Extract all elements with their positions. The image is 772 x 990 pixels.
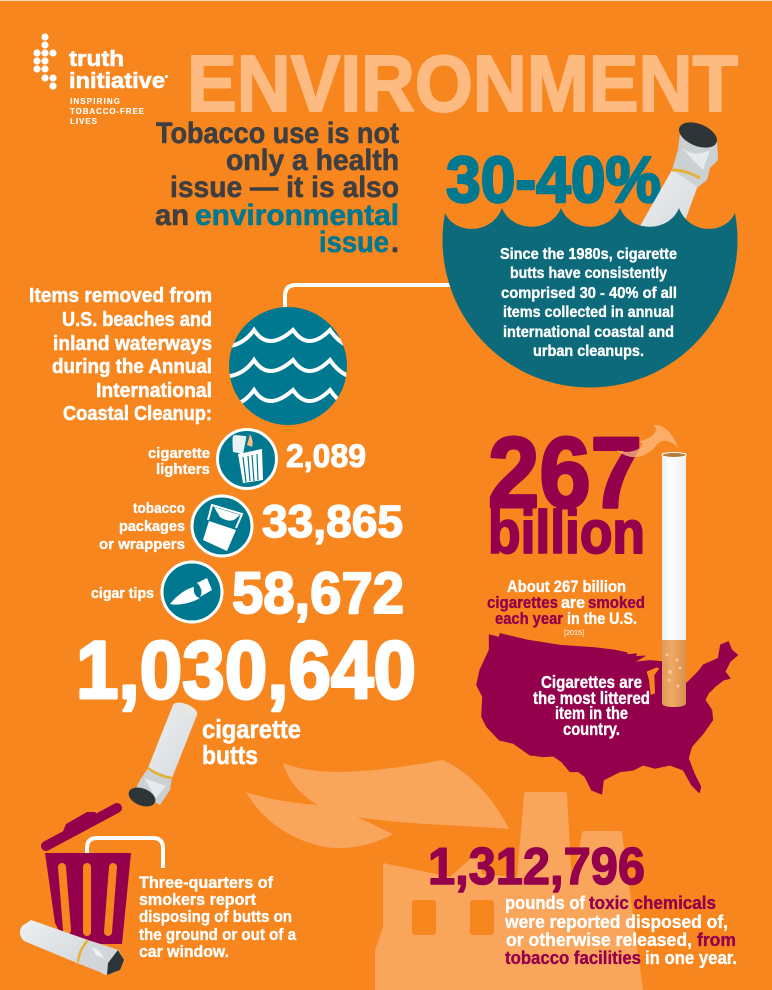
items removed heading <box>29 285 212 425</box>
icon: trash can <box>45 808 131 944</box>
items removed heading: Items removed from <box>29 285 212 307</box>
stat: 267 billion: billion <box>488 499 645 566</box>
icon: lighter <box>218 430 276 488</box>
title: ENVIRONMENT <box>187 39 738 128</box>
big stat 30-40%: 30-40% <box>446 143 661 216</box>
items removed heading: inland waterways <box>53 333 212 355</box>
connector line to smokers text <box>87 838 163 868</box>
logo: truth initiative: INSPIRING <box>70 97 120 106</box>
stat: cigarette butts: 1,030,640 <box>76 625 416 716</box>
stat description: are <box>561 593 585 612</box>
logo: truth initiative: truth <box>69 46 124 71</box>
stat: toxic chemicals: were reported disposed of, <box>504 912 728 932</box>
bowl text: butts have consistently <box>510 265 667 282</box>
intro statement: environmental <box>195 199 399 232</box>
icon: tall cigarette <box>662 452 686 707</box>
stat: toxic chemicals: tobacco facilities <box>505 948 641 968</box>
intro statement: an <box>155 199 189 232</box>
stat: tobacco packages: packages <box>119 518 185 535</box>
icon: smoke <box>617 425 678 457</box>
stat: cigarette butts: butts <box>202 740 258 770</box>
stat: cigarette butts: cigarette <box>202 714 301 744</box>
bowl text: urban cleanups. <box>533 343 644 360</box>
items removed heading: during the Annual <box>52 356 212 378</box>
stat description <box>487 577 645 637</box>
connector line <box>285 285 450 310</box>
stat: tobacco packages: tobacco <box>133 500 185 517</box>
smokers text <box>139 873 296 961</box>
stat: cigarette lighters: 2,089 <box>286 438 366 474</box>
map text: item in the <box>555 703 628 723</box>
bowl text: comprised 30 - 40% of all <box>501 285 677 302</box>
stat: toxic chemicals <box>428 838 737 968</box>
stat: toxic chemicals: pounds of <box>505 893 586 913</box>
items removed heading: U.S. beaches and <box>62 309 212 331</box>
smokers text: the ground or out of a <box>139 925 296 944</box>
icon: waves circle <box>229 307 347 425</box>
intro statement: . <box>391 226 399 259</box>
stat: cigarette lighters <box>148 430 366 488</box>
bowl text: items collected in annual <box>503 304 674 321</box>
stat: toxic chemicals: from <box>697 930 736 950</box>
bowl text: Since the 1980s, cigarette <box>500 246 677 263</box>
smokers text: smokers report <box>139 890 256 909</box>
stat description: cigarettes <box>487 593 558 612</box>
smokers text: car window. <box>139 942 229 961</box>
stat description: [2015] <box>564 628 584 637</box>
stat: cigar tips <box>91 561 404 626</box>
stat: tobacco packages: or wrappers <box>99 536 185 553</box>
stat: toxic chemicals: in one year. <box>645 948 737 968</box>
stat: toxic chemicals: or otherwise released, <box>506 930 692 950</box>
intro statement: issue — it is also <box>170 171 399 204</box>
icon: cigarette pack <box>192 496 252 556</box>
stat description: each year <box>495 609 563 628</box>
stat: toxic chemicals: toxic chemicals <box>589 893 716 913</box>
stat description: in the U.S. <box>567 609 637 628</box>
stat: cigarette lighters: cigarette <box>148 445 210 462</box>
bowl text <box>500 246 677 360</box>
intro statement: only a health <box>226 144 399 177</box>
stat: cigar tips: cigar tips <box>91 585 154 602</box>
intro statement: Tobacco use is not <box>156 117 399 150</box>
stat: toxic chemicals: 1,312,796 <box>428 838 645 896</box>
logo: truth initiative: ® <box>165 74 168 79</box>
logo: truth initiative: TOBACCO-FREE <box>70 107 145 116</box>
items removed heading: International <box>96 380 212 402</box>
logo: truth initiative <box>33 33 168 126</box>
stat: 267 billion: 267 <box>488 417 642 529</box>
map text: the most littered <box>533 688 650 708</box>
stat: tobacco packages <box>99 496 403 556</box>
stat: cigar tips: 58,672 <box>232 561 404 626</box>
map: United States <box>477 634 738 794</box>
map text <box>533 672 650 739</box>
icon: cigar tip <box>162 562 222 622</box>
smokers text: disposing of butts on <box>139 907 292 926</box>
bowl text: international coastal and <box>503 324 674 341</box>
stat description: smoked <box>588 593 645 612</box>
icon: cigarette butt in water <box>632 117 721 240</box>
stat: cigarette lighters: lighters <box>156 461 210 478</box>
intro statement: issue <box>319 226 389 259</box>
icon: cigarette butt by trash <box>20 920 124 975</box>
smokers text: Three-quarters of <box>139 873 273 892</box>
stat: tobacco packages: 33,865 <box>262 496 403 547</box>
logo: truth initiative: LIVES <box>70 117 98 126</box>
map text: Cigarettes are <box>541 672 642 692</box>
panel: teal water bowl <box>442 208 737 388</box>
map text: country. <box>563 719 620 739</box>
intro statement <box>155 117 399 259</box>
items removed heading: Coastal Cleanup: <box>63 403 212 425</box>
stat description: About 267 billion <box>507 577 626 596</box>
logo: truth initiative: initiative <box>69 68 165 93</box>
factory silhouette with smoke <box>246 760 643 990</box>
icon: falling cigarette butt <box>126 700 199 810</box>
stat: cigarette butts <box>76 625 416 770</box>
